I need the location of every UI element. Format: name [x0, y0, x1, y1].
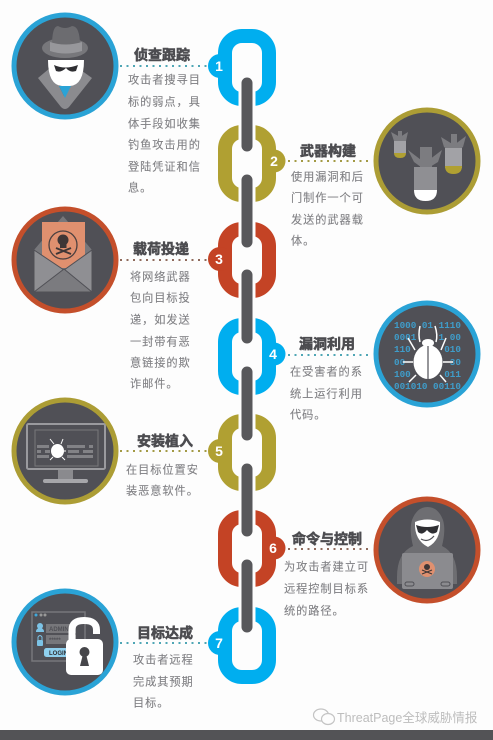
text block 6 [284, 560, 369, 618]
text block 6: 为攻击者建立可 [284, 560, 369, 574]
icon: bug on binary: 001010 00110 [394, 381, 461, 392]
step 4: exploitation [262, 303, 478, 422]
text block 3 [130, 270, 191, 390]
text block 2: 发送的武器载 [291, 212, 364, 226]
text block 7: 目标。 [133, 696, 169, 710]
dotted connector 2 [288, 160, 372, 162]
text block 1: 登陆凭证和信 [128, 160, 201, 174]
number badge 3: 3 [215, 251, 223, 267]
icon: open padlock on login window: ***** [49, 638, 61, 644]
text block 1: 体手段如收集 [128, 116, 201, 130]
icon: hacker with laptop [376, 499, 478, 601]
icon: bug on binary [376, 303, 478, 405]
step 7: actions on objectives [14, 591, 232, 710]
number badge 3 [208, 247, 232, 271]
dotted connector 5 [120, 450, 208, 452]
number badge 1: 1 [215, 58, 223, 74]
step 3: delivery [14, 209, 232, 390]
text block 3: 诈邮件。 [130, 376, 179, 390]
text block 1: 标的弱点，具 [128, 94, 201, 108]
number badge 5 [208, 439, 232, 463]
heading 2: 武器构建 [300, 143, 356, 159]
icon: open padlock on login window: ADMIN [49, 627, 69, 633]
number badge 6 [262, 536, 286, 560]
dotted connector 1 [120, 65, 208, 67]
heading 1: 侦查跟踪 [134, 47, 190, 63]
icon: open padlock on login window [14, 591, 116, 693]
text block 3: 包向目标投 [130, 290, 191, 304]
heading 4: 漏洞利用 [299, 336, 355, 352]
text block 3: 一封带有恶 [130, 334, 191, 348]
text block 2 [291, 170, 364, 248]
text block 6: 远程控制目标系 [284, 582, 369, 596]
dotted connector 4 [288, 354, 372, 356]
watermark [314, 709, 478, 725]
text block 6: 统的路径。 [284, 604, 345, 618]
heading 6: 命令与控制 [292, 531, 362, 547]
text block 4: 代码。 [290, 408, 326, 422]
icon: wechat [314, 709, 334, 724]
icon: bug on binary: 00 30 [394, 357, 461, 368]
text block 5: 在目标位置安 [126, 462, 199, 476]
text block 4 [290, 364, 363, 422]
icon: bombs [376, 110, 478, 212]
text block 1: 息。 [128, 180, 152, 194]
text block 7: 完成其预期 [133, 674, 194, 688]
text block 4: 在受害者的系 [290, 364, 363, 378]
step 1: reconnaissance [14, 15, 232, 194]
text block 5: 装恶意软件。 [126, 484, 199, 498]
heading 7: 目标达成 [137, 625, 193, 641]
watermark text: ThreatPage全球威胁情报 [337, 710, 478, 725]
number badge 2 [262, 150, 286, 172]
icon: open padlock on login window: LOGIN [49, 651, 68, 657]
text block 3: 递，如发送 [130, 312, 191, 326]
icon: envelope with skull [14, 209, 116, 311]
icon: bug on binary: 110 010 [394, 344, 461, 355]
number badge 4: 4 [269, 346, 277, 362]
dotted connector 7 [120, 642, 208, 644]
dotted connector 3 [120, 259, 208, 261]
text block 7: 攻击者远程 [133, 652, 194, 666]
number badge 7: 7 [215, 635, 223, 651]
number badge 5: 5 [215, 443, 223, 459]
step 5: installation [14, 400, 232, 502]
icon: bug on binary: 0001 1 00 [394, 332, 461, 343]
text block 2: 体。 [291, 234, 315, 248]
icon: spy [14, 15, 116, 117]
number badge 7 [208, 631, 232, 655]
number badge 4 [262, 342, 286, 366]
icon: monitor with bug [14, 400, 116, 502]
text block 1: 攻击者搜寻目 [128, 72, 201, 86]
icon: bug on binary: 1000 01 1110 [394, 320, 461, 331]
bottom bar [0, 730, 493, 740]
chain [225, 36, 269, 677]
heading 5: 安装植入 [137, 433, 193, 449]
text block 2: 使用漏洞和后 [291, 170, 364, 184]
text block 5 [126, 462, 199, 498]
step 6: command and control [262, 499, 478, 618]
number badge 2: 2 [270, 153, 278, 169]
text block 3: 意链接的欺 [130, 356, 191, 370]
text block 7 [133, 652, 194, 710]
heading 3: 载荷投递 [133, 241, 189, 257]
step 2: weaponization [262, 110, 478, 248]
text block 1 [128, 72, 201, 194]
number badge 6: 6 [269, 540, 277, 556]
icon: bug on binary: 100 011 [394, 369, 461, 380]
text block 3: 将网络武器 [130, 270, 191, 284]
dotted connector 6 [288, 548, 372, 550]
text block 2: 门制作一个可 [291, 190, 364, 204]
number badge 1 [208, 54, 232, 78]
text block 1: 钓鱼攻击用的 [128, 138, 201, 152]
text block 4: 统上运行利用 [290, 388, 363, 400]
